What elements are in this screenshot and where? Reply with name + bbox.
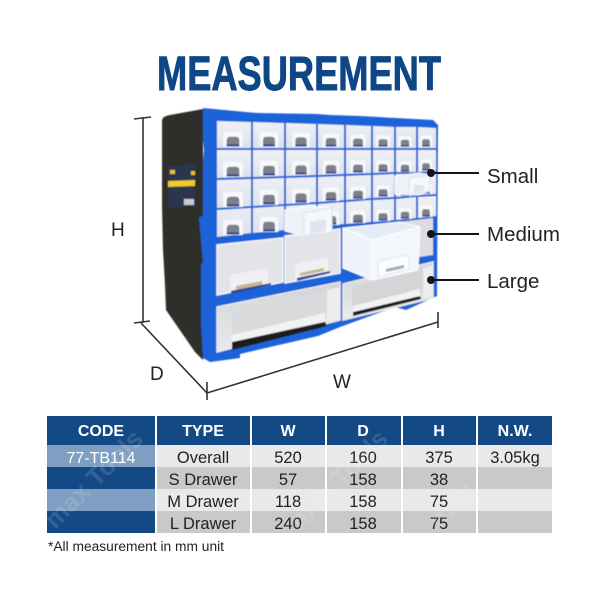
- drawer handles: [223, 132, 432, 235]
- pulled-out medium drawer: [343, 222, 420, 280]
- large drawers: [217, 262, 433, 352]
- depth dimension line: [141, 323, 207, 400]
- table row: overall: 3.05kg: [490, 449, 540, 467]
- callout: large: Large: [487, 270, 539, 293]
- dimension letters: [111, 220, 351, 393]
- watermark: max Tools: [38, 423, 149, 534]
- table row: L drawer: 240: [274, 515, 302, 533]
- table row: M drawer: 158: [349, 493, 377, 511]
- table row: overall: 520: [274, 449, 302, 467]
- pulled-out small drawer lower: [285, 206, 332, 236]
- side label: [168, 164, 195, 208]
- height dimension line: [134, 117, 151, 323]
- table header: TYPE: [182, 423, 224, 440]
- callout: large: [427, 270, 539, 293]
- drawer cabinet: [162, 108, 438, 362]
- cabinet black side: [162, 109, 203, 360]
- callout: medium: [427, 223, 560, 246]
- table row: S drawer: 38: [430, 471, 448, 489]
- table row: overall: Overall: [177, 449, 229, 467]
- table row: M drawer: M Drawer: [167, 493, 239, 511]
- table header: H: [433, 423, 445, 440]
- watermark: max Tools: [283, 423, 394, 534]
- table row: S drawer: [169, 471, 448, 489]
- watermark: [38, 423, 481, 534]
- table row: L drawer: 75: [430, 515, 448, 533]
- table row: L drawer: 158: [349, 515, 377, 533]
- table row: S drawer: 57: [279, 471, 297, 489]
- callout: small: [427, 165, 538, 188]
- table row: overall: 160: [349, 449, 377, 467]
- table header: D: [357, 423, 369, 440]
- table row: L drawer: [170, 515, 448, 533]
- small drawers row 1: [217, 121, 436, 148]
- table row: L drawer: L Drawer: [170, 515, 237, 533]
- table header: W: [280, 423, 296, 440]
- dimension letters: W: [333, 372, 351, 393]
- medium drawers: [217, 218, 433, 295]
- table row: M drawer: [167, 493, 448, 511]
- table row: S drawer: 158: [349, 471, 377, 489]
- specification table: [47, 416, 552, 533]
- table header: N.W.: [498, 423, 532, 440]
- title: MEASUREMENT: [157, 48, 441, 101]
- table header: [47, 416, 552, 445]
- table header: CODE: [78, 423, 124, 440]
- table row backgrounds: [47, 445, 552, 533]
- callout: small: Small: [487, 165, 538, 188]
- table row: M drawer: 118: [275, 493, 301, 511]
- cabinet blue frame: [199, 108, 438, 362]
- table row: S drawer: S Drawer: [169, 471, 238, 489]
- table code cell: 77-TB114: [66, 450, 136, 467]
- watermark: max: [423, 476, 481, 534]
- dimension letters: D: [150, 364, 164, 385]
- small drawers row 4: [217, 196, 436, 237]
- dimension letters: H: [111, 220, 125, 241]
- width dimension line: [207, 312, 438, 393]
- table row: overall: [177, 449, 540, 467]
- footnote: *All measurement in mm unit: [48, 539, 224, 554]
- pulled-out small drawer upper: [395, 173, 430, 195]
- table row: overall: 375: [425, 449, 453, 467]
- callout: medium: Medium: [487, 223, 560, 246]
- small drawers row 3: [217, 173, 436, 208]
- table row: M drawer: 75: [430, 493, 448, 511]
- small drawers row 2: [217, 150, 436, 178]
